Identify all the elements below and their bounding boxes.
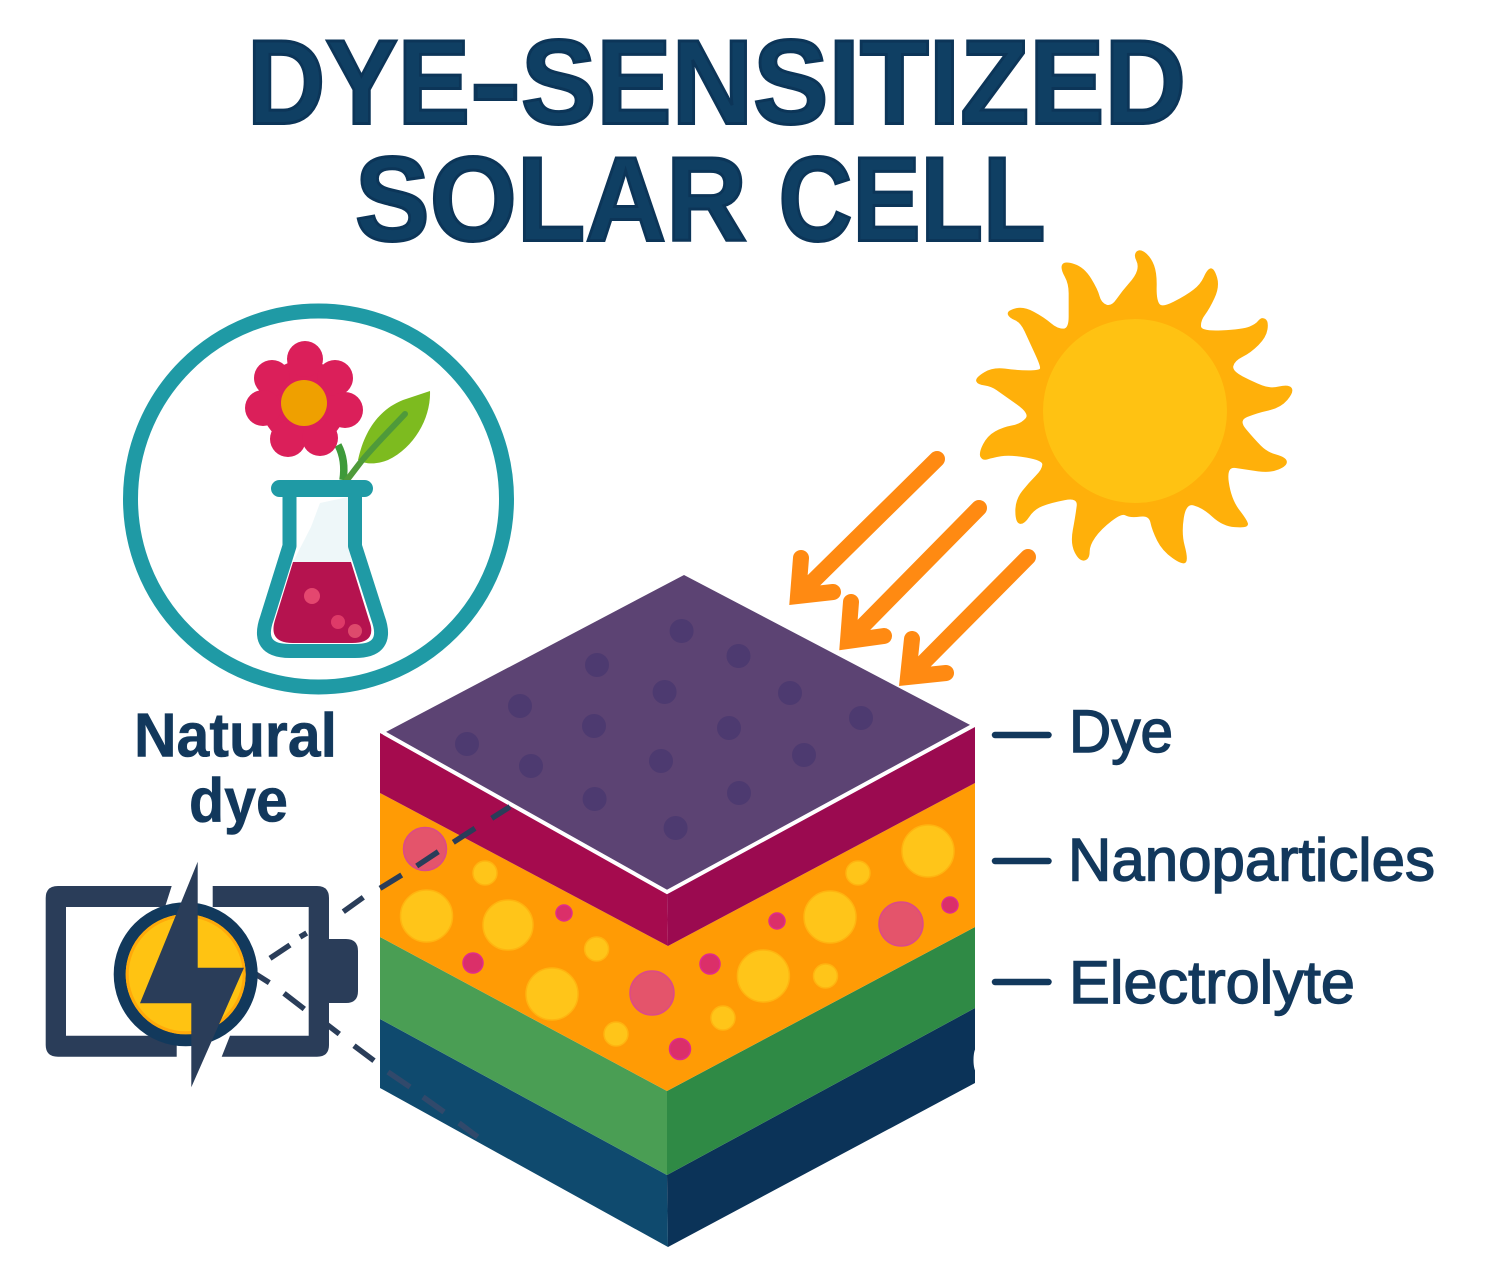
- title: -: [470, 16, 522, 150]
- title: [247, 16, 1186, 266]
- layer labels: [995, 698, 1435, 1016]
- battery body: [46, 886, 358, 1057]
- top dye surface: [384, 575, 974, 892]
- natural dye label: [134, 702, 337, 836]
- icon: battery with sun coin and lightning bolt: [46, 862, 358, 1087]
- layered cell block: [380, 575, 980, 1247]
- icon: sun: [977, 252, 1291, 562]
- flower stem: [338, 445, 344, 480]
- dye layer walls: [380, 727, 975, 946]
- lightning bolt: [140, 862, 244, 1087]
- arrow 2: [848, 508, 979, 641]
- flask: [264, 480, 381, 651]
- title: CELL: [778, 132, 1046, 266]
- title: DYE: [247, 16, 470, 150]
- arrow 1: [798, 459, 937, 596]
- coin: [120, 908, 252, 1040]
- label: Dye: Dye: [1069, 698, 1173, 765]
- icon: natural dye flask and flower in circle: [130, 311, 506, 687]
- flower: [245, 341, 363, 457]
- dashed connector lines: [247, 807, 510, 1137]
- label: Nanoparticles: Nanoparticles: [1068, 826, 1435, 894]
- large pink particles: [404, 828, 923, 1015]
- label: Electrolyte: Electrolyte: [1069, 949, 1355, 1016]
- arrow 3: [908, 557, 1028, 677]
- yellow nanoparticles: [400, 825, 954, 1046]
- nanoparticle layer: [380, 783, 975, 1091]
- natural dye label: Natural: [134, 702, 337, 770]
- title: SENSITIZED: [521, 16, 1186, 150]
- leaf: [347, 391, 430, 480]
- natural dye label: dye: [189, 766, 288, 836]
- electrolyte layer: [380, 927, 975, 1175]
- sunlight arrows: [798, 459, 1028, 677]
- title: SOLAR: [355, 132, 747, 266]
- small pink particles: [463, 897, 958, 1060]
- bottom electrode layer: [380, 1008, 975, 1247]
